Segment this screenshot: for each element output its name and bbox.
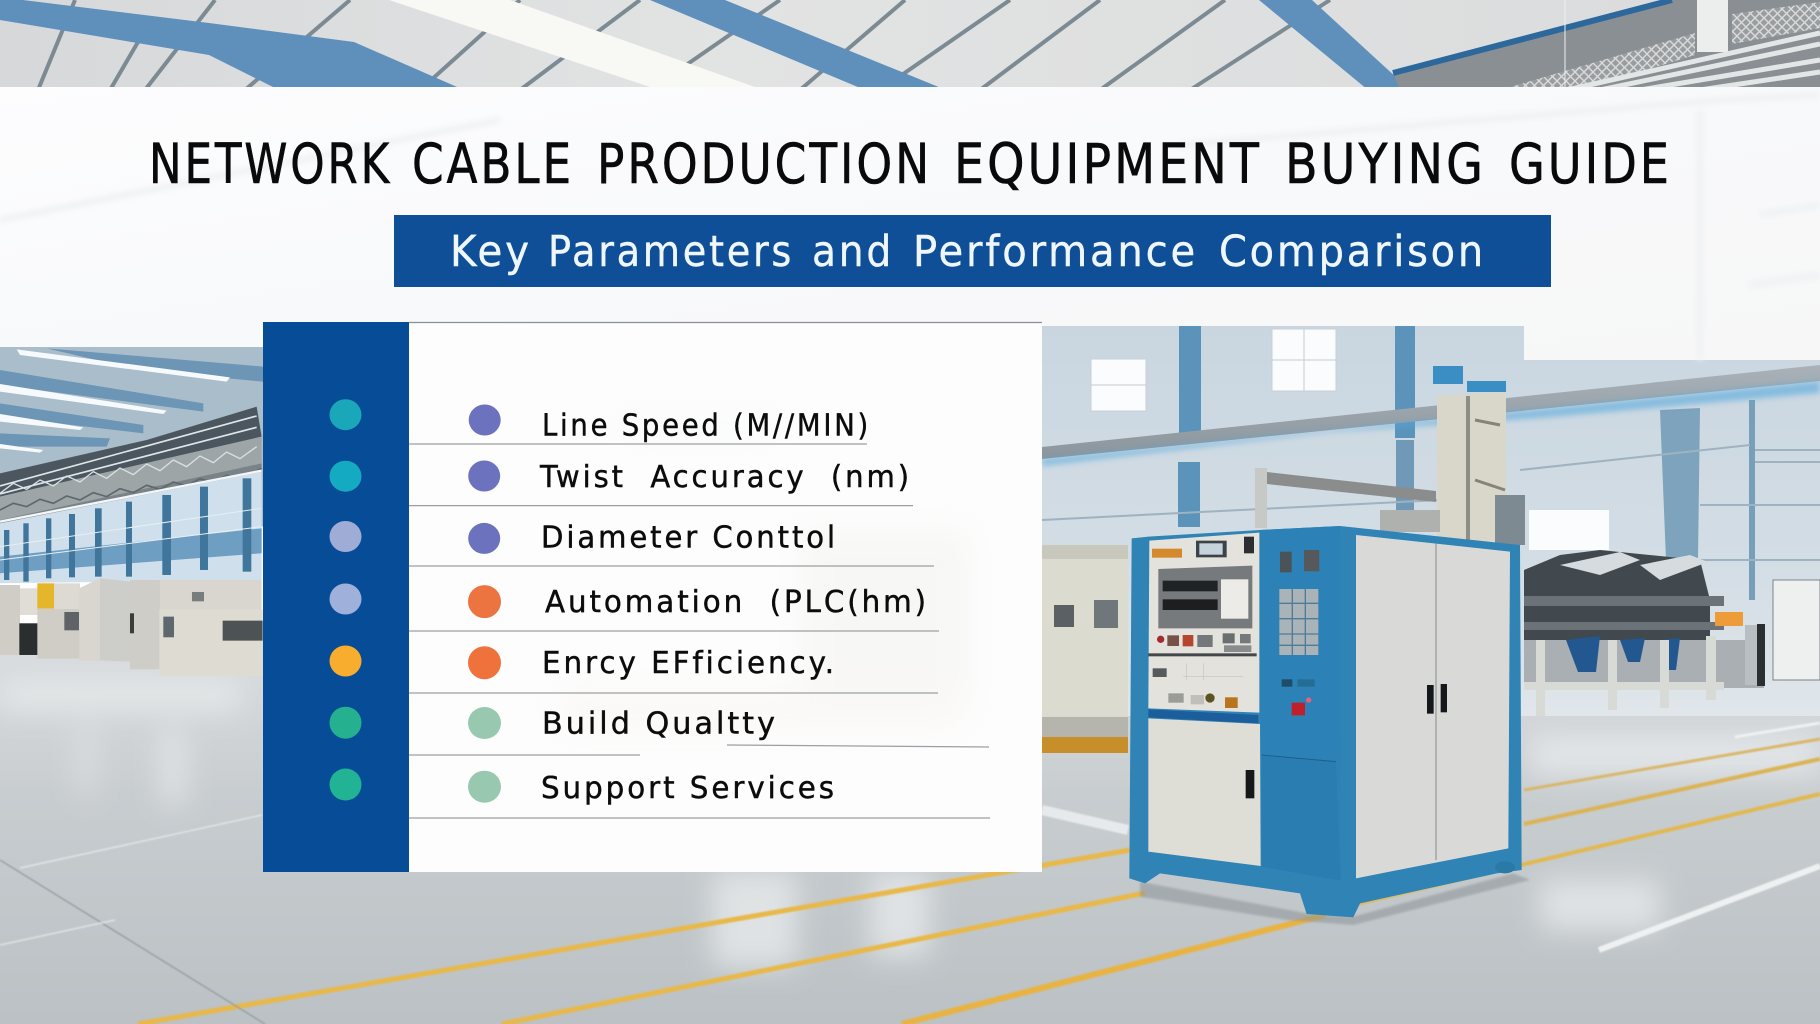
- foreground machine cabinet: [1129, 526, 1530, 925]
- back wall: [0, 472, 262, 583]
- ceiling lights: [0, 349, 230, 453]
- row labels: Twist Accuracy (nm): [539, 460, 912, 495]
- emergency stop: [1292, 703, 1305, 715]
- keypad: [1279, 589, 1318, 655]
- panel background: [263, 322, 1042, 872]
- title: BUYING: [1285, 132, 1486, 196]
- subtitle banner: Parameters: [548, 227, 794, 277]
- machine shadow: [1140, 873, 1530, 925]
- panel: key parameters list: [263, 322, 1042, 872]
- row labels: Automation (PLC(hm): [545, 585, 929, 620]
- row labels: Diameter Conttol: [541, 520, 838, 556]
- console screen: [1158, 566, 1252, 628]
- subtitle banner: Comparison: [1219, 227, 1486, 277]
- roof right machinery: [1393, 0, 1820, 90]
- machines row: [0, 585, 20, 655]
- title: CABLE: [412, 132, 574, 196]
- title: [149, 132, 1672, 196]
- subtitle banner: Performance: [913, 227, 1198, 277]
- background: upper roof strip: [0, 0, 1820, 90]
- translucent white header band: [0, 87, 1820, 360]
- title: PRODUCTION: [597, 132, 932, 196]
- machine feet: [1495, 861, 1515, 873]
- floor markings: yellow and white lines: [0, 723, 1820, 1024]
- subtitle banner: and: [812, 227, 894, 277]
- row labels: Support Services: [541, 771, 837, 806]
- door handles: [1427, 685, 1434, 714]
- background: right factory hall: [1042, 326, 1820, 753]
- title: NETWORK: [149, 132, 392, 196]
- row labels: [539, 408, 929, 806]
- title: GUIDE: [1509, 132, 1672, 196]
- cabinet doors: [1356, 535, 1510, 878]
- blue beams: [0, 0, 1410, 90]
- background machine left: [1042, 545, 1128, 717]
- row labels: Line Speed (M//MIN): [542, 408, 871, 444]
- control console: [1148, 533, 1259, 713]
- roof purlins: [38, 0, 1330, 90]
- lower door: [1148, 718, 1261, 866]
- row labels: Build Qualtty: [542, 707, 778, 742]
- production line right: [1524, 550, 1710, 640]
- subtitle banner: [394, 215, 1551, 287]
- blue frame: [1129, 526, 1522, 917]
- ceiling beams: [0, 348, 263, 447]
- title: EQUIPMENT: [954, 132, 1262, 196]
- console buttons: [1157, 633, 1251, 652]
- overhead duct: [1042, 365, 1820, 459]
- subtitle banner: Key: [450, 227, 532, 277]
- wall windows: [1091, 329, 1609, 550]
- panel sidebar: [263, 322, 409, 872]
- tower behind machine: [1437, 392, 1506, 541]
- sidebar markers: [330, 399, 362, 800]
- truss: [0, 407, 262, 497]
- background: left factory hall: [0, 340, 267, 676]
- roof skylight: [389, 0, 755, 87]
- right wall column and pipes: [1660, 408, 1700, 560]
- wall columns: [1178, 326, 1415, 527]
- row labels: Enrcy EFficiency.: [542, 646, 837, 681]
- robot arm: [1267, 472, 1436, 502]
- row markers: [468, 404, 501, 803]
- background: factory floor: [0, 640, 1820, 1024]
